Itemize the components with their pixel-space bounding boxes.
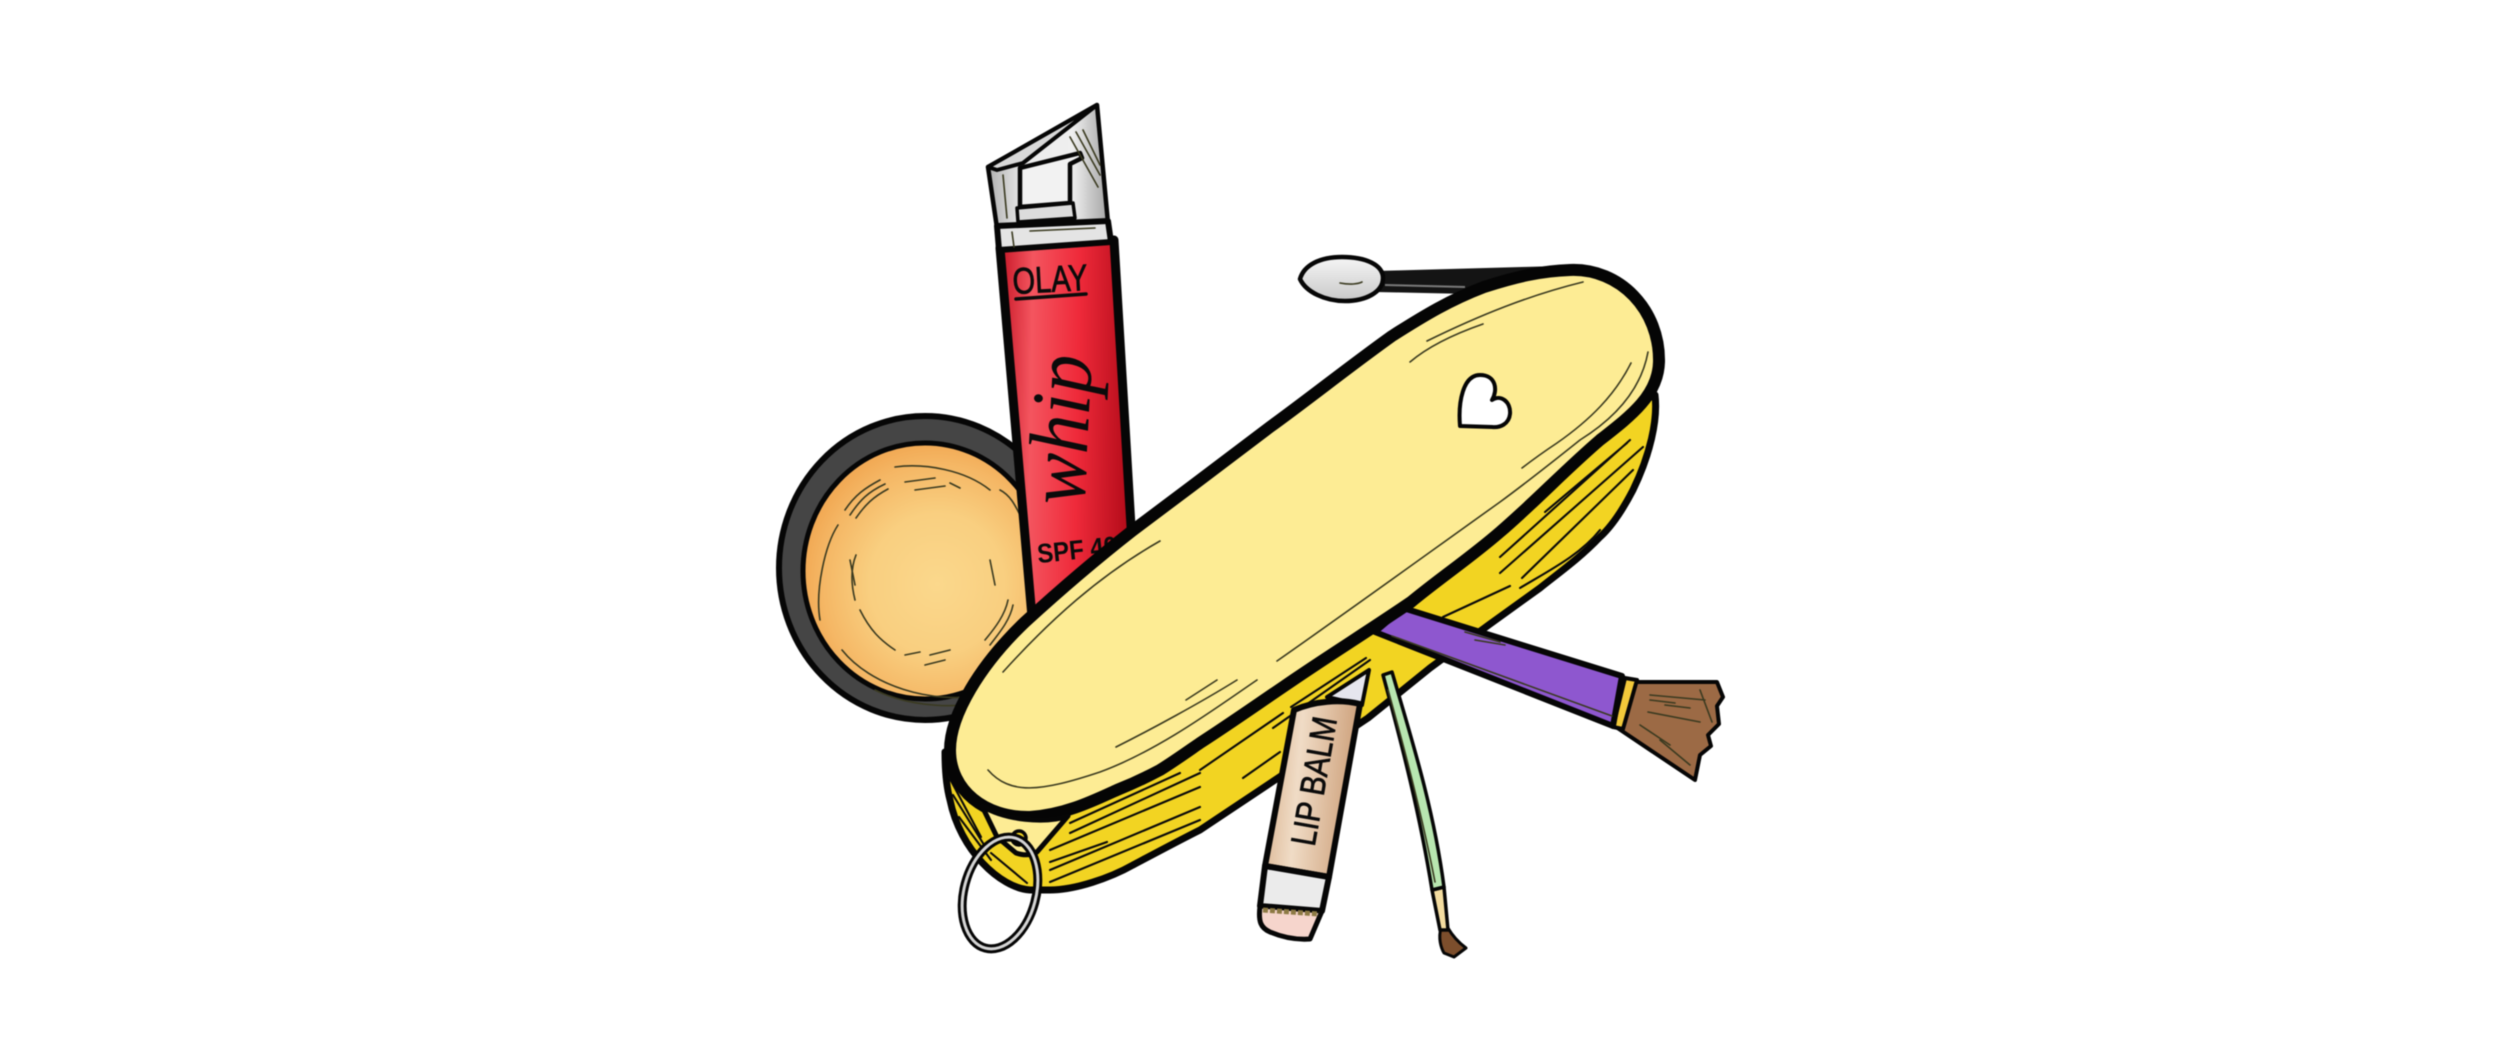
pouch lid bbox=[950, 270, 1659, 817]
heart icon bbox=[1460, 375, 1510, 427]
key ring bbox=[950, 829, 1050, 957]
balm cap tip bbox=[1327, 670, 1369, 705]
bottle: Olay Whip SPF 40 bbox=[988, 105, 1133, 640]
makeup brush, purple bbox=[1375, 608, 1723, 780]
balm tube bbox=[1265, 701, 1360, 877]
label: SPF 40: SPF 40 bbox=[1036, 531, 1118, 569]
thin brush handle bbox=[1383, 672, 1444, 890]
balm lower collar bbox=[1260, 866, 1329, 911]
thin brush tip bbox=[1440, 928, 1466, 957]
brush handle bbox=[1375, 608, 1622, 726]
bottle cap bbox=[988, 105, 1111, 250]
bottle body bbox=[1000, 240, 1133, 640]
label: OLAY: OLAY bbox=[1012, 257, 1089, 302]
thin paint brush, green bbox=[1383, 672, 1466, 957]
zipper pull and key ring bbox=[950, 806, 1068, 957]
zipper bead bbox=[1012, 831, 1026, 845]
lip balm bbox=[1259, 670, 1369, 939]
zipper tab bbox=[982, 806, 1068, 855]
balm base bbox=[1259, 906, 1322, 939]
label underline bbox=[1016, 294, 1086, 299]
brush bristles bbox=[1616, 682, 1723, 780]
thin brush ferrule bbox=[1432, 887, 1448, 930]
brush ferrule bbox=[1613, 678, 1637, 729]
sponge applicator bbox=[1300, 257, 1560, 301]
compact powder bbox=[779, 416, 1071, 720]
pouch lower body bbox=[945, 395, 1656, 890]
label: whip: whip bbox=[1010, 352, 1111, 507]
label: LIP BALM: LIP BALM bbox=[1284, 714, 1345, 848]
